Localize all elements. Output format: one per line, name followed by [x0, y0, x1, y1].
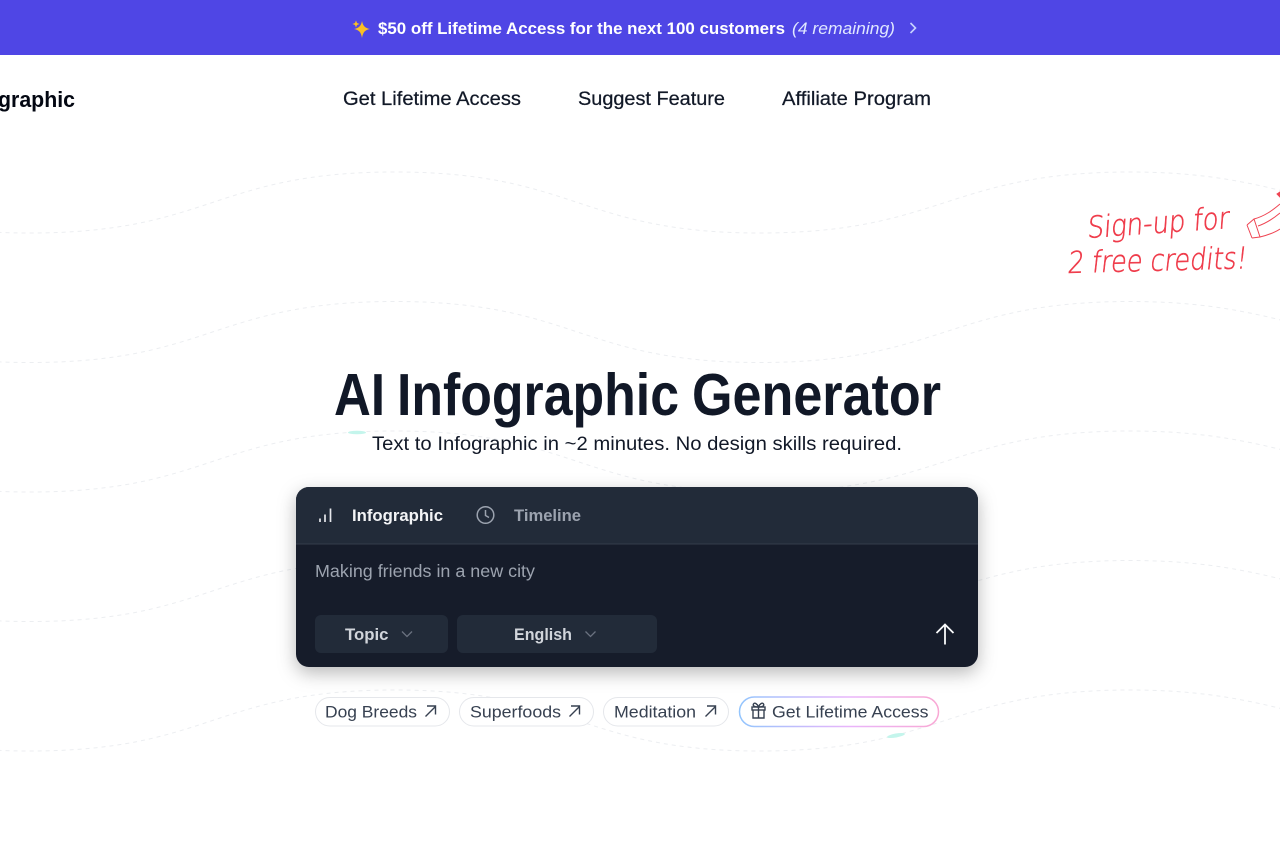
language dropdown: English — [514, 625, 572, 644]
pill: dog breeds — [316, 698, 450, 726]
handwritten callout: Sign-up for — [1086, 201, 1231, 246]
icon: gift — [752, 703, 765, 718]
pill: superfoods — [460, 698, 594, 726]
title: AI — [334, 362, 385, 428]
title — [334, 362, 941, 428]
pill: meditation — [604, 698, 728, 726]
navigation: Suggest Feature — [578, 88, 725, 110]
handwritten callout — [1066, 192, 1280, 281]
topic dropdown — [315, 615, 448, 653]
card tab bar: Timeline — [514, 506, 581, 525]
title: Infographic — [397, 362, 679, 428]
promo banner: $50 off Lifetime Access for the next 100 customers — [378, 19, 785, 38]
pill: get lifetime access: Get Lifetime Access — [772, 702, 928, 722]
icon: send arrow — [936, 624, 954, 644]
card tab bar — [296, 487, 978, 544]
card tab bar: Infographic — [352, 506, 443, 525]
background wave lines — [0, 172, 1280, 751]
subtitle: Text to Infographic in ~2 minutes. No design skills required. — [372, 433, 902, 455]
pill: meditation: Meditation — [614, 702, 696, 722]
icon: bar chart — [320, 508, 330, 522]
promo banner — [0, 0, 1280, 55]
navigation — [0, 87, 931, 112]
placeholder text: Making friends in a new city — [315, 561, 535, 581]
navigation: Affiliate Program — [782, 88, 931, 110]
icon: arrow — [1247, 192, 1280, 238]
pill: get lifetime access — [740, 697, 938, 726]
icon: sparkles — [352, 20, 370, 38]
handwritten callout: 2 free credits! — [1066, 241, 1249, 281]
navigation: Get Lifetime Access — [343, 88, 521, 110]
topic dropdown: Topic — [345, 625, 388, 644]
pill: superfoods: Superfoods — [470, 702, 561, 722]
pill: dog breeds: Dog Breeds — [325, 702, 417, 722]
suggestion pills — [316, 697, 938, 726]
panel: prompt card — [296, 487, 978, 667]
logo wordmark: graphic — [0, 87, 75, 112]
icon: clock — [477, 507, 494, 523]
icon: chevron right — [910, 23, 916, 33]
language dropdown — [457, 615, 657, 653]
title: Generator — [692, 362, 941, 428]
promo banner: (4 remaining) — [792, 19, 895, 38]
